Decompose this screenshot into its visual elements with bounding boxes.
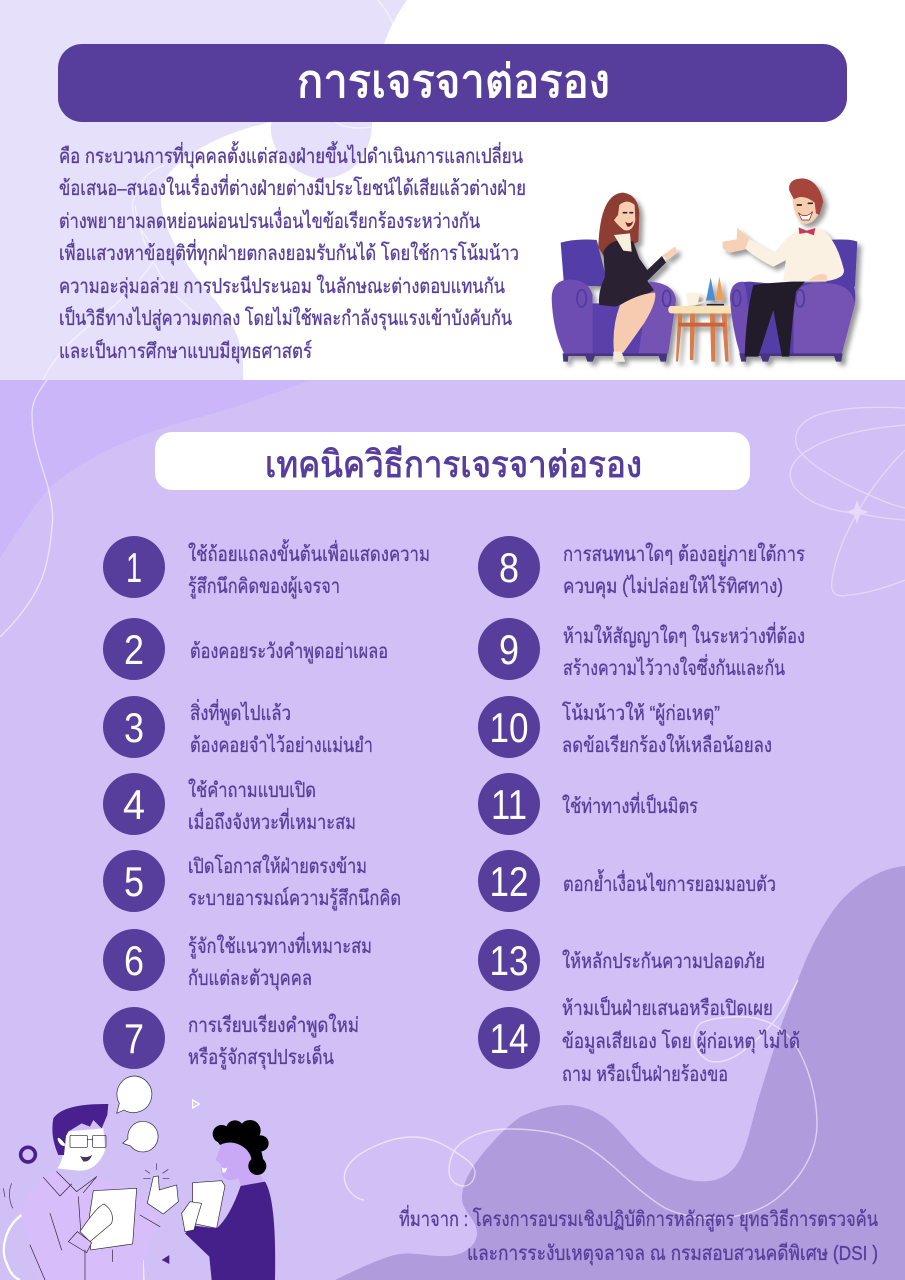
technique 13: 13 <box>490 937 528 984</box>
decorative sparkle star <box>845 500 869 524</box>
technique 10: ลดข้อเรียกร้องให้เหลือน้อยลง <box>562 733 772 757</box>
definition text block: ต่างพยายามลดหย่อนผ่อนปรนเงื่อนไขข้อเรียกร้องระหว่างกัน <box>59 207 480 233</box>
right armchair <box>730 239 857 362</box>
technique 5: 5 <box>124 858 144 905</box>
technique 8: การสนทนาใดๆ ต้องอยู่ภายใต้การ <box>563 542 805 567</box>
technique 4: เมื่อถึงจังหวะที่เหมาะสม <box>188 808 356 834</box>
technique 7: หรือรู้จักสรุปประเด็น <box>188 1043 334 1070</box>
technique 7 <box>103 1007 359 1070</box>
technique 9: ห้ามให้สัญญาใดๆ ในระหว่างที่ต้อง <box>563 622 805 648</box>
technique 7: 7 <box>124 1015 144 1062</box>
technique 14: ห้ามเป็นฝ่ายเสนอหรือเปิดเผย <box>562 994 773 1020</box>
technique 11: 11 <box>491 781 527 828</box>
definition text block <box>59 141 526 364</box>
technique 3 <box>103 696 373 758</box>
technique 5 <box>103 850 401 912</box>
technique 6: รู้จักใช้แนวทางที่เหมาะสม <box>188 932 372 959</box>
background: lower lilac section <box>0 380 905 1280</box>
technique 4: 4 <box>123 781 145 828</box>
technique 8 <box>478 536 805 599</box>
man with notebook <box>22 1104 178 1280</box>
technique 6: กับแต่ละตัวบุคคล <box>188 967 312 991</box>
technique 13 <box>478 929 765 991</box>
technique 11 <box>478 773 698 835</box>
technique 8: ควบคุม (ไม่ปล่อยให้ไร้ทิศทาง) <box>563 574 783 599</box>
illustration: two people talking with notebooks and speech bubbles <box>3 1076 275 1280</box>
technique 7: การเรียบเรียงคำพูดใหม่ <box>188 1013 359 1038</box>
techniques heading pill <box>155 432 750 490</box>
title banner: การเจรจาต่อรอง <box>297 55 610 107</box>
man <box>723 178 844 357</box>
technique 3: 3 <box>124 704 144 751</box>
technique 14: ถาม หรือเป็นฝ่ายร้องขอ <box>562 1060 728 1086</box>
technique 10: โน้มน้าวให้ “ผู้ก่อเหตุ” <box>562 701 720 726</box>
decorative triangles <box>162 1100 199 1264</box>
technique 4: ใช้คำถามแบบเปิด <box>188 778 316 802</box>
technique 9 <box>478 618 805 680</box>
coffee table with cup and flags <box>668 277 734 362</box>
technique 2 <box>103 618 388 680</box>
technique 10 <box>478 696 772 758</box>
technique 3: สิ่งที่พูดไปแล้ว <box>190 699 291 726</box>
technique 14 <box>478 994 800 1086</box>
technique 5: เปิดโอกาสให้ฝ่ายตรงข้าม <box>188 854 367 878</box>
technique 1: รู้สึกนึกคิดของผู้เจรจา <box>188 575 340 599</box>
speech bubble top <box>117 1076 152 1113</box>
technique 1: 1 <box>126 544 142 591</box>
technique 6 <box>103 929 372 991</box>
definition text block: ความอะลุ่มอล่วย การประนีประนอม ในลักษณะต่างตอบแทนกัน <box>59 274 505 299</box>
speech bubble lower <box>123 1121 158 1152</box>
technique 12: ตอกย้ำเงื่อนไขการยอมมอบตัว <box>563 869 776 896</box>
technique 12 <box>478 850 776 912</box>
source credit <box>399 1205 878 1266</box>
technique 9: สร้างความไว้วางใจซึ่งกันและกัน <box>563 654 785 680</box>
technique 1: ใช้ถ้อยแถลงขั้นต้นเพื่อแสดงความ <box>188 539 430 566</box>
decorative ring and arc <box>3 1147 143 1280</box>
title banner <box>58 44 847 122</box>
technique 5: ระบายอารมณ์ความรู้สึกนึกคิด <box>188 887 401 911</box>
left armchair <box>552 240 676 362</box>
background: top white section with lavender blob <box>0 0 905 380</box>
woman <box>598 193 677 362</box>
technique 2: 2 <box>124 626 144 673</box>
technique 3: ต้องคอยจำไว้อย่างแม่นยำ <box>190 733 373 757</box>
technique 13: ให้หลักประกันความปลอดภัย <box>562 949 765 973</box>
technique 10: 10 <box>490 704 528 751</box>
technique 6: 6 <box>124 937 144 984</box>
technique 1 <box>103 536 430 599</box>
illustration: two people negotiating on armchairs <box>552 178 857 362</box>
technique 9: 9 <box>499 626 519 673</box>
woman with notebook <box>182 1120 275 1280</box>
definition text block: และเป็นการศึกษาแบบมียุทธศาสตร์ <box>59 337 312 364</box>
technique 8: 8 <box>499 544 519 591</box>
definition text block: เพื่อแสวงหาข้อยุติที่ทุกฝ่ายตกลงยอมรับกันได้ โดยใช้การโน้มน้าว <box>59 239 519 266</box>
technique 11: ใช้ท่าทางที่เป็นมิตร <box>562 792 698 818</box>
definition text block: คือ กระบวนการที่บุคคลตั้งแต่สองฝ่ายขึ้นไปดำเนินการแลกเปลี่ยน <box>59 141 523 169</box>
technique 4 <box>103 773 356 835</box>
technique 14: 14 <box>490 1015 528 1062</box>
technique 14: ข้อมูลเสียเอง โดย ผู้ก่อเหตุ ไม่ได้ <box>562 1029 800 1054</box>
techniques heading pill: เทคนิควิธีการเจรจาต่อรอง <box>265 444 642 485</box>
definition text block: ข้อเสนอ–สนองในเรื่องที่ต่างฝ่ายต่างมีประโยชน์ได้เสียแล้วต่างฝ่าย <box>59 174 526 200</box>
technique 2: ต้องคอยระวังคำพูดอย่าเผลอ <box>190 640 388 664</box>
technique 12: 12 <box>490 858 528 905</box>
definition text block: เป็นวิธีทางไปสู่ความตกลง โดยไม่ใช้พละกำลังรุนแรงเข้าบังคับกัน <box>59 304 512 331</box>
